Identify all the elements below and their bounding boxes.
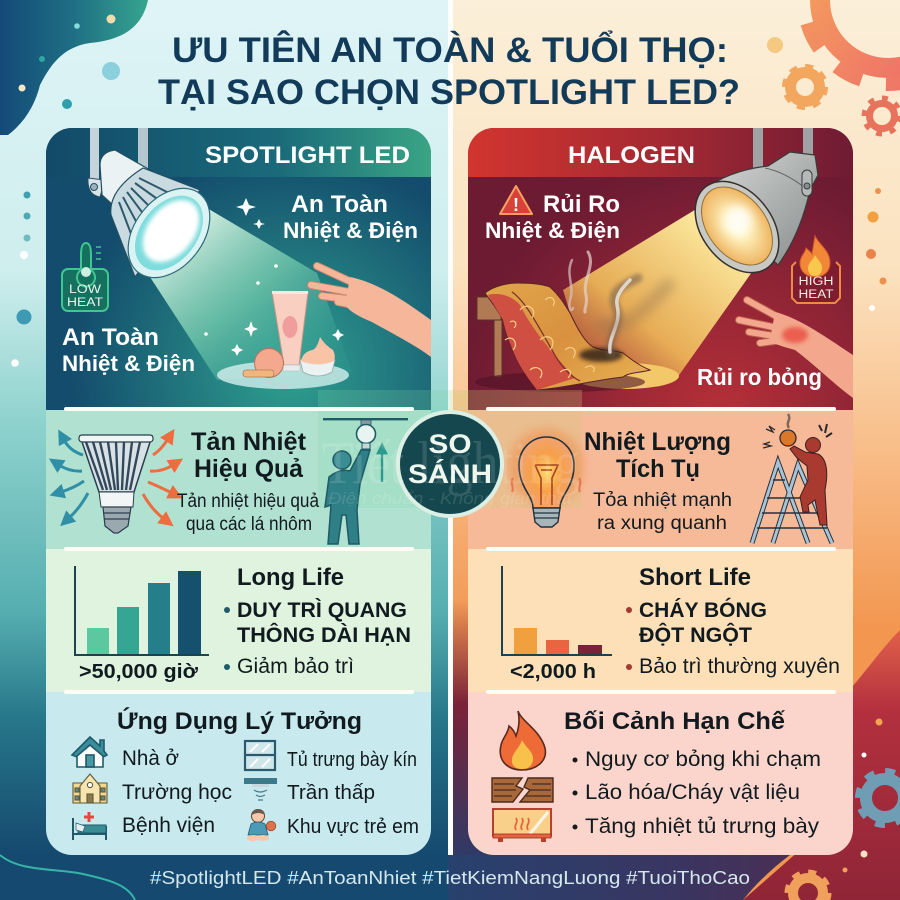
row short life background: [468, 549, 853, 692]
long life text: Giảm bảo trì: [237, 655, 354, 678]
smoke: [569, 252, 668, 355]
safety text top: An Toàn: [291, 191, 388, 218]
light pool: [582, 363, 679, 389]
spotlight lamp LED: [88, 128, 210, 278]
limiting context list: Tăng nhiệt tủ trưng bày: [585, 815, 820, 838]
product platform: [217, 361, 349, 389]
high heat badge: [792, 236, 840, 303]
safety text bottom: An Toàn: [62, 324, 159, 351]
burnt fabric: [485, 283, 650, 390]
ideal applications heading: Ứng Dụng Lý Tưởng: [117, 707, 362, 735]
icon: person on ladder: [752, 414, 832, 543]
limiting context list: Lão hóa/Cháy vật liệu: [585, 781, 800, 804]
right column labels: Trần thấp: [287, 782, 375, 804]
short life text: ĐỘT NGỘT: [639, 623, 752, 647]
bar chart: LED lifetime: >50,000 giờ: [79, 661, 199, 683]
short life text: [626, 564, 840, 678]
right column labels: Khu vực trẻ em: [287, 816, 419, 838]
left column labels: [122, 747, 232, 837]
bar chart: LED lifetime: [75, 566, 209, 683]
warning triangle: [500, 186, 532, 215]
orange gear bottom: [787, 872, 829, 900]
high heat badge: HEAT: [798, 289, 834, 301]
low heat badge: LOW: [69, 284, 101, 296]
safety text bottom: Nhiệt & Điện: [62, 351, 195, 376]
short life text: Short Life: [639, 564, 751, 591]
risk text top: Nhiệt & Điện: [485, 218, 620, 243]
title: ƯU TIÊN AN TOÀN & TUỔI THỌ:: [172, 30, 728, 70]
light beam halogen: [563, 208, 752, 378]
sparkles LED: [204, 198, 344, 356]
bar chart: halogen lifetime: [502, 566, 612, 683]
heat dissipation text: qua các lá nhôm: [186, 514, 312, 535]
left column labels: Nhà ở: [122, 747, 179, 770]
hashtags: #SpotlightLED #AnToanNhiet #TietKiemNangLuong #TuoiThoCao: [150, 867, 750, 888]
row limits background: [468, 692, 853, 855]
arrows: hot air: [143, 439, 173, 519]
heat build-up text: [584, 428, 732, 534]
safety text top: Nhiệt & Điện: [283, 218, 418, 243]
low heat badge: [62, 243, 108, 311]
heat dissipation text: Hiệu Quả: [194, 455, 304, 483]
left side dots: [11, 192, 31, 367]
heat build-up text: Tích Tụ: [616, 455, 700, 483]
icon: child with ball: [247, 809, 276, 841]
risk text top: [485, 191, 620, 243]
limiting context list: Nguy cơ bỏng khi chạm: [585, 748, 821, 771]
long life text: [224, 564, 411, 678]
safety text top: [284, 194, 417, 242]
heat dissipation text: Tản nhiệt hiệu quả: [177, 491, 319, 512]
icon: hot display case: [493, 809, 551, 842]
header text LED: SPOTLIGHT LED: [205, 142, 410, 169]
heat build-up text: ra xung quanh: [597, 513, 727, 534]
centre white divider: [448, 0, 453, 855]
icon: display cabinet: [245, 741, 275, 770]
watermark text: Tiết lighting: [322, 430, 580, 496]
panel: Halogen: [468, 128, 853, 855]
row long life background: [46, 549, 431, 692]
hand LED: [311, 266, 431, 357]
bar chart: halogen lifetime: <2,000 h: [510, 661, 596, 683]
icon: cracked wood: [492, 778, 553, 802]
watermark text: Điện chuẩn - Không gian thật: [328, 489, 573, 508]
limiting context heading: Bối Cảnh Hạn Chế: [564, 708, 786, 735]
burn risk text: Rủi ro bỏng: [697, 364, 822, 390]
hero background halogen: [468, 128, 853, 410]
icon: LED heat sink bulb: [79, 435, 153, 533]
hero background LED: [46, 128, 431, 410]
right column labels: Tủ trưng bày kín: [287, 749, 417, 771]
shadow fabric: [475, 372, 645, 392]
so sanh badge: [398, 412, 502, 516]
right side dots: [842, 188, 886, 872]
icon: house: [72, 737, 107, 767]
icon: person changing bulb: [323, 418, 408, 544]
small red gear: [864, 98, 900, 134]
blue-grey gear: [858, 771, 900, 825]
limiting context list: [572, 748, 821, 838]
background left half: [0, 0, 448, 900]
spotlight lamp halogen: [694, 128, 818, 274]
safety text bottom: [62, 324, 195, 376]
cosmetics products: [243, 291, 335, 378]
hand halogen: [739, 300, 853, 398]
large gear top right: [804, 0, 900, 84]
long life text: THÔNG DÀI HẠN: [237, 623, 411, 647]
left column labels: Bệnh viện: [122, 814, 215, 837]
icon: hospital bed: [73, 810, 106, 840]
table: [477, 297, 502, 377]
icon: flame: [500, 711, 545, 770]
bottom-left curve: [0, 855, 135, 900]
top-left decorative blob: [0, 0, 148, 135]
short life text: CHÁY BÓNG: [639, 598, 767, 622]
small orange gear: [784, 66, 826, 108]
light beam LED: [150, 208, 352, 380]
panel: Spotlight LED: [46, 128, 431, 855]
row applications background: [46, 692, 431, 855]
cream dot: [767, 37, 783, 53]
left column labels: Trường học: [122, 781, 232, 804]
heat build-up text: Nhiệt Lượng: [584, 428, 731, 456]
title: [158, 30, 740, 112]
header band LED: [46, 128, 431, 177]
so sanh badge: SÁNH: [408, 458, 492, 489]
heat build-up text: Tỏa nhiệt mạnh: [593, 490, 732, 511]
header text halogen: HALOGEN: [568, 142, 695, 169]
risk text top: Rủi Ro: [543, 191, 620, 218]
long life text: Long Life: [237, 564, 344, 591]
high heat badge: HIGH: [798, 276, 834, 288]
heat dissipation text: Tản Nhiệt: [191, 428, 307, 456]
icon: glowing incandescent bulb: [508, 429, 584, 527]
so sanh badge: SO: [428, 429, 472, 459]
short life text: Bảo trì thường xuyên: [639, 655, 840, 678]
row heat build-up background: [468, 410, 853, 549]
background right half: [448, 0, 900, 900]
right column labels: [287, 749, 419, 838]
watermark tint: [318, 390, 582, 508]
row dividers: [64, 407, 836, 694]
long life text: DUY TRÌ QUANG: [237, 599, 407, 622]
title: TẠI SAO CHỌN SPOTLIGHT LED?: [158, 73, 740, 112]
icon: ceiling light: [244, 778, 277, 800]
heat dissipation text: [177, 428, 319, 535]
row heat dissipation background: [46, 410, 431, 549]
warning triangle: !: [513, 195, 519, 215]
arrows: cool air: [59, 440, 88, 518]
header band halogen: [468, 128, 853, 177]
low heat badge: HEAT: [67, 297, 103, 309]
icon: school: [73, 774, 107, 803]
